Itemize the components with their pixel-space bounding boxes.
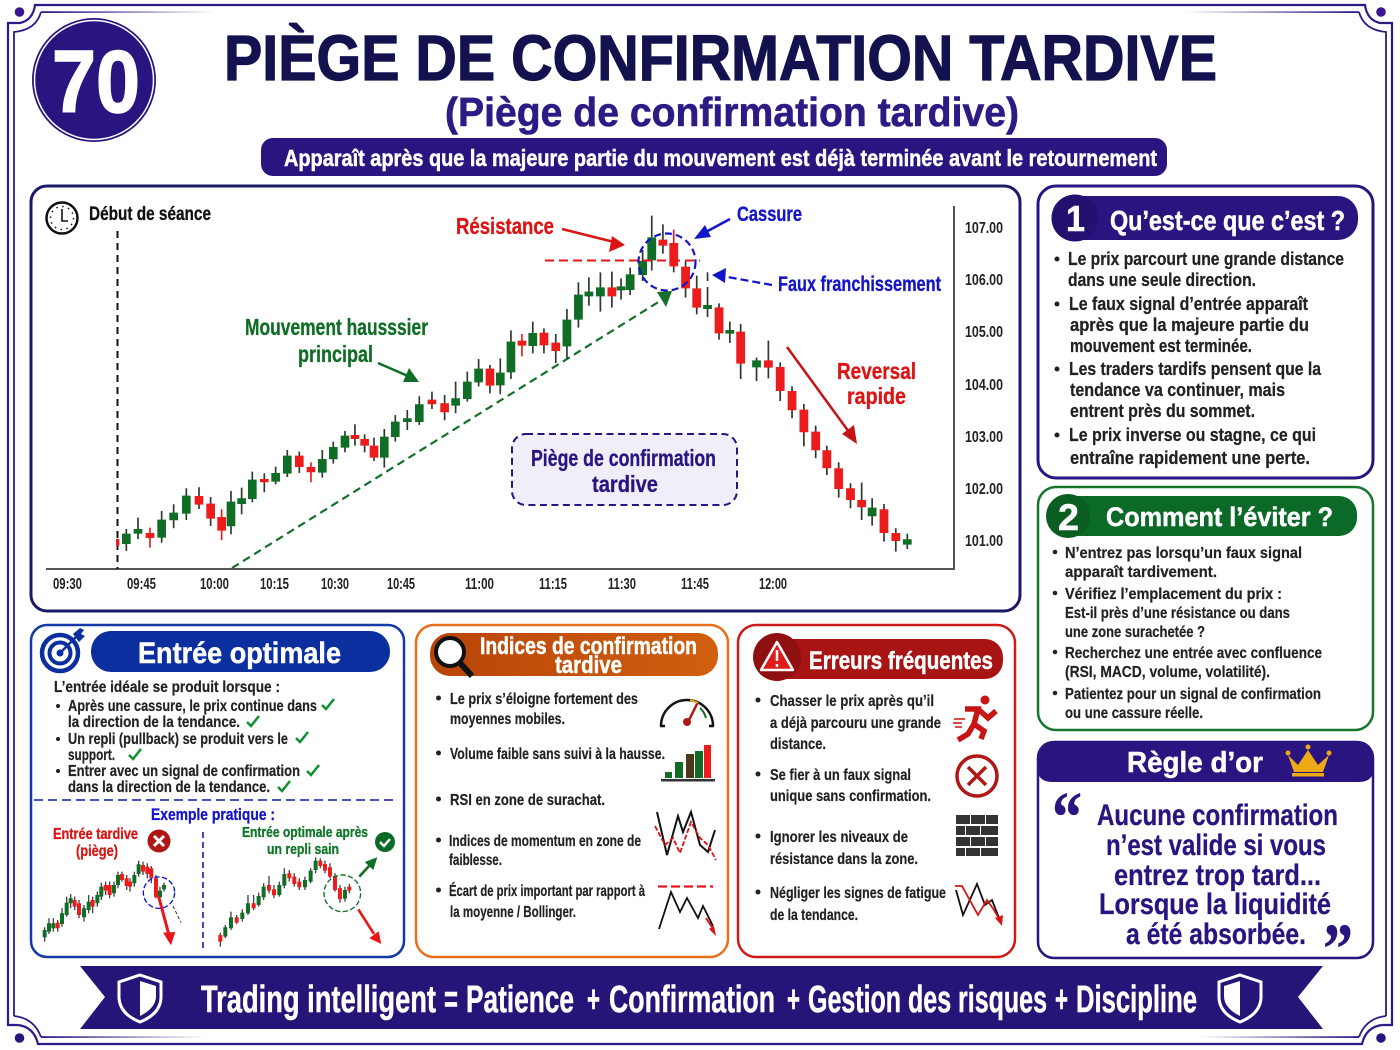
text block: Après une cassure, le prix continue dans: [68, 698, 317, 715]
slogan: +: [1055, 979, 1068, 1021]
bullet list: de la tendance.: [770, 907, 858, 924]
breakout circle: [638, 234, 696, 290]
label: late entry: Entrée tardive: [53, 826, 138, 843]
bullet list: dans une seule direction.: [1068, 270, 1256, 290]
text block: Entrer avec un signal de confirmation: [68, 763, 300, 780]
bullet list: résistance dans la zone.: [770, 851, 918, 868]
label: main upward move: [245, 314, 428, 382]
label: late entry: [53, 826, 138, 860]
bullet list: a déjà parcouru une grande: [770, 715, 941, 732]
bullet list: Le prix inverse ou stagne, ce qui: [1069, 425, 1316, 445]
label: false breakout: Faux franchissement: [778, 273, 941, 296]
y axis labels: [965, 220, 1003, 550]
callout: late confirmation trap: Piège de confirmation: [531, 445, 716, 471]
bullet list: entrent près du sommet.: [1070, 401, 1255, 421]
quote mark close: ”: [1323, 909, 1353, 989]
candlesticks: peak and reversal section: [533, 216, 907, 552]
bullet list: Se fier à un faux signal: [770, 767, 911, 784]
slogan: Discipline: [1076, 979, 1197, 1021]
label: breakout: [694, 203, 802, 239]
bullet list: Volume faible sans suivi à la hausse.: [450, 746, 665, 763]
heading pill: [1052, 194, 1358, 242]
x axis labels: 12:00: [759, 576, 787, 593]
bullet list: Patientez pour un signal de confirmation: [1065, 686, 1321, 703]
label: optimal entry after pullback: [242, 824, 368, 858]
label: breakout: Cassure: [737, 203, 802, 226]
x axis labels: 10:45: [387, 576, 415, 593]
text block: L’entrée idéale se produit lorsque :: [54, 679, 280, 696]
mini chart: optimal entry: [220, 857, 381, 947]
text block: [54, 679, 317, 796]
bullet list: ou une cassure réelle.: [1065, 705, 1203, 722]
label: false breakout: [712, 268, 941, 296]
bullet list: [436, 691, 665, 921]
check marks: [129, 699, 334, 791]
y axis labels: 105.00: [965, 324, 1003, 341]
icon: RSI zigzag: [655, 812, 716, 860]
icon: warning: [753, 633, 801, 681]
golden rule quote: Aucune confirmation: [1097, 799, 1338, 832]
label: rapid reversal: [787, 347, 916, 444]
subtitle: (Piège de confirmation tardive): [445, 89, 1019, 135]
bullet list: Indices de momentum en zone de: [449, 833, 641, 850]
icon: check badge: [375, 832, 395, 852]
quote mark open: “: [1052, 777, 1082, 857]
bullet list: RSI en zone de surachat.: [450, 792, 605, 809]
bullet list: Recherchez une entrée avec confluence: [1065, 645, 1322, 662]
heading pill: Indices de confirmation: [480, 633, 697, 660]
label: optimal entry after pullback: un repli sain: [267, 841, 339, 858]
text block: la direction de la tendance.: [68, 714, 240, 731]
panel: golden rule: [1038, 741, 1373, 989]
icon: crown: [1286, 744, 1332, 776]
icon: shield right: [1219, 975, 1261, 1022]
x axis labels: 09:30: [53, 576, 82, 593]
bullet list: [756, 693, 946, 924]
label: resistance: [456, 213, 625, 252]
y axis labels: 104.00: [965, 377, 1003, 394]
y axis labels: 107.00: [965, 220, 1003, 237]
x axis labels: 11:00: [465, 576, 494, 593]
slogan: Gestion des risques: [808, 979, 1047, 1021]
bullet list: Le prix s’éloigne fortement des: [450, 691, 638, 708]
text block: support.: [68, 747, 115, 764]
bullet list: (RSI, MACD, volume, volatilité).: [1065, 664, 1270, 681]
bullet list: la moyenne / Bollinger.: [450, 904, 576, 921]
mini chart: late entry: [45, 861, 181, 945]
y axis labels: 103.00: [965, 429, 1003, 446]
banner tagline: [261, 138, 1167, 176]
slogan: [201, 979, 1197, 1021]
y axis labels: 101.00: [965, 533, 1003, 550]
heading pill: tardive: [555, 652, 622, 679]
slogan: Patience: [466, 979, 574, 1021]
number badge 70: [32, 18, 156, 142]
heading pill: [1046, 494, 1357, 538]
golden rule quote: a été absorbée.: [1126, 918, 1306, 951]
session start line: [116, 231, 118, 569]
heading: practical example: Exemple pratique :: [151, 805, 275, 824]
label: rapid reversal: rapide: [847, 383, 906, 409]
label: main upward move: principal: [298, 341, 373, 367]
bullet list: faiblesse.: [449, 852, 502, 869]
golden rule quote: n’est valide si vous: [1106, 829, 1326, 862]
icon: magnifier: [436, 638, 472, 676]
bullet list: après que la majeure partie du: [1070, 315, 1309, 335]
x axis labels: 11:45: [681, 576, 709, 593]
icon: cross badge: [148, 830, 170, 852]
banner tagline: Apparaît après que la majeure partie du mouvement est déjà terminée avant le retournement: [284, 145, 1157, 171]
bullet list: Le faux signal d’entrée apparaît: [1069, 294, 1308, 314]
panel: what is it: [1038, 186, 1373, 478]
text block: Un repli (pullback) se produit vers le: [68, 731, 288, 748]
bottom ribbon: [80, 966, 1323, 1029]
bullet list: Négliger les signes de fatigue: [770, 885, 946, 902]
bullet list: mouvement est terminée.: [1070, 336, 1252, 356]
slogan: +: [787, 979, 800, 1021]
panel: main candlestick chart: [31, 186, 1020, 611]
icon: price gap chart: [658, 886, 716, 936]
icon: brick wall: [956, 815, 998, 856]
icon: crossed circle: [957, 756, 997, 796]
label: session start: Début de séance: [89, 204, 211, 225]
bullet list: [1053, 545, 1322, 722]
bullet list: Écart de prix important par rapport à: [449, 883, 645, 900]
label: late entry: (piège): [76, 843, 118, 860]
bullet list: Est-il près d’une résistance ou dans: [1065, 605, 1290, 622]
bullet list: une zone surachetée ?: [1065, 624, 1205, 641]
heading band: [1038, 741, 1373, 782]
panel: frequent mistakes: [738, 625, 1015, 957]
bullet list: N’entrez pas lorsqu’un faux signal: [1065, 545, 1302, 562]
bullet list: Les traders tardifs pensent que la: [1069, 359, 1322, 379]
callout: late confirmation trap: tardive: [592, 471, 658, 497]
callout: late confirmation trap: [512, 434, 737, 505]
bullet list: distance.: [770, 736, 826, 753]
label: rapid reversal: Reversal: [837, 358, 916, 384]
slogan: +: [587, 979, 600, 1021]
panel: how to avoid it: [1038, 487, 1373, 730]
y axis labels: 102.00: [965, 481, 1003, 498]
x axis labels: 11:15: [539, 576, 567, 593]
x axis labels: 10:30: [321, 576, 349, 593]
text block: dans la direction de la tendance.: [68, 779, 270, 796]
panel: optimal entry: [31, 625, 404, 957]
heading pill: 2: [1058, 497, 1079, 538]
label: main upward move: Mouvement hausssier: [245, 314, 428, 340]
heading pill: Erreurs fréquentes: [809, 647, 993, 675]
label: resistance: Résistance: [456, 213, 554, 239]
resistance level line: [545, 260, 700, 262]
heading pill: [91, 631, 390, 672]
x axis labels: 10:00: [200, 576, 229, 593]
x axis labels: [53, 576, 787, 593]
x axis labels: 11:30: [608, 576, 636, 593]
bullet list: Ignorer les niveaux de: [770, 829, 908, 846]
heading pill: Qu’est-ce que c’est ?: [1110, 205, 1345, 236]
golden rule quote: Lorsque la liquidité: [1099, 888, 1331, 921]
y axis labels: 106.00: [965, 272, 1003, 289]
bullet list: unique sans confirmation.: [770, 788, 931, 805]
heading band: Règle d’or: [1127, 747, 1263, 779]
chart axes: [46, 206, 954, 569]
icon: clock: [46, 202, 78, 234]
icon: volume bars: [661, 745, 715, 782]
slogan: Trading intelligent: [201, 979, 436, 1021]
bullet list: apparaît tardivement.: [1065, 564, 1217, 581]
icon: fatigue chart: [955, 884, 1003, 926]
heading pill: 1: [1066, 198, 1085, 239]
green trend line: [232, 291, 672, 568]
heading pill: Comment l’éviter ?: [1106, 502, 1333, 532]
heading pill: Entrée optimale: [138, 637, 341, 670]
bullet list: moyennes mobiles.: [450, 711, 565, 728]
title: PIÈGE DE CONFIRMATION TARDIVE: [224, 22, 1217, 94]
icon: target: [42, 628, 85, 671]
bullet list: tendance va continuer, mais: [1070, 380, 1285, 400]
bullet list: [1054, 249, 1344, 468]
bullet list: entraîne rapidement une perte.: [1070, 448, 1310, 468]
x axis labels: 09:45: [127, 576, 156, 593]
bullet list: Chasser le prix après qu’il: [770, 693, 934, 710]
icon: gauge: [660, 700, 714, 726]
slogan: Confirmation: [609, 979, 775, 1021]
label: optimal entry after pullback: Entrée optimale après: [242, 824, 368, 841]
golden rule quote: entrez trop tard...: [1114, 859, 1321, 892]
icon: shield left: [119, 975, 161, 1022]
slogan: =: [444, 979, 458, 1021]
bullet list: Le prix parcourt une grande distance: [1068, 249, 1344, 269]
bullet list: Vérifiez l’emplacement du prix :: [1065, 586, 1282, 603]
x axis labels: 10:15: [260, 576, 289, 593]
golden rule quote: [1097, 799, 1338, 951]
candlesticks: rising section: [118, 330, 522, 551]
heading pill: [760, 639, 1003, 679]
panel: late confirmation clues: [416, 625, 728, 957]
icon: running figure: [953, 696, 996, 740]
heading pill: [430, 633, 718, 679]
number badge 70: 70: [52, 32, 140, 131]
